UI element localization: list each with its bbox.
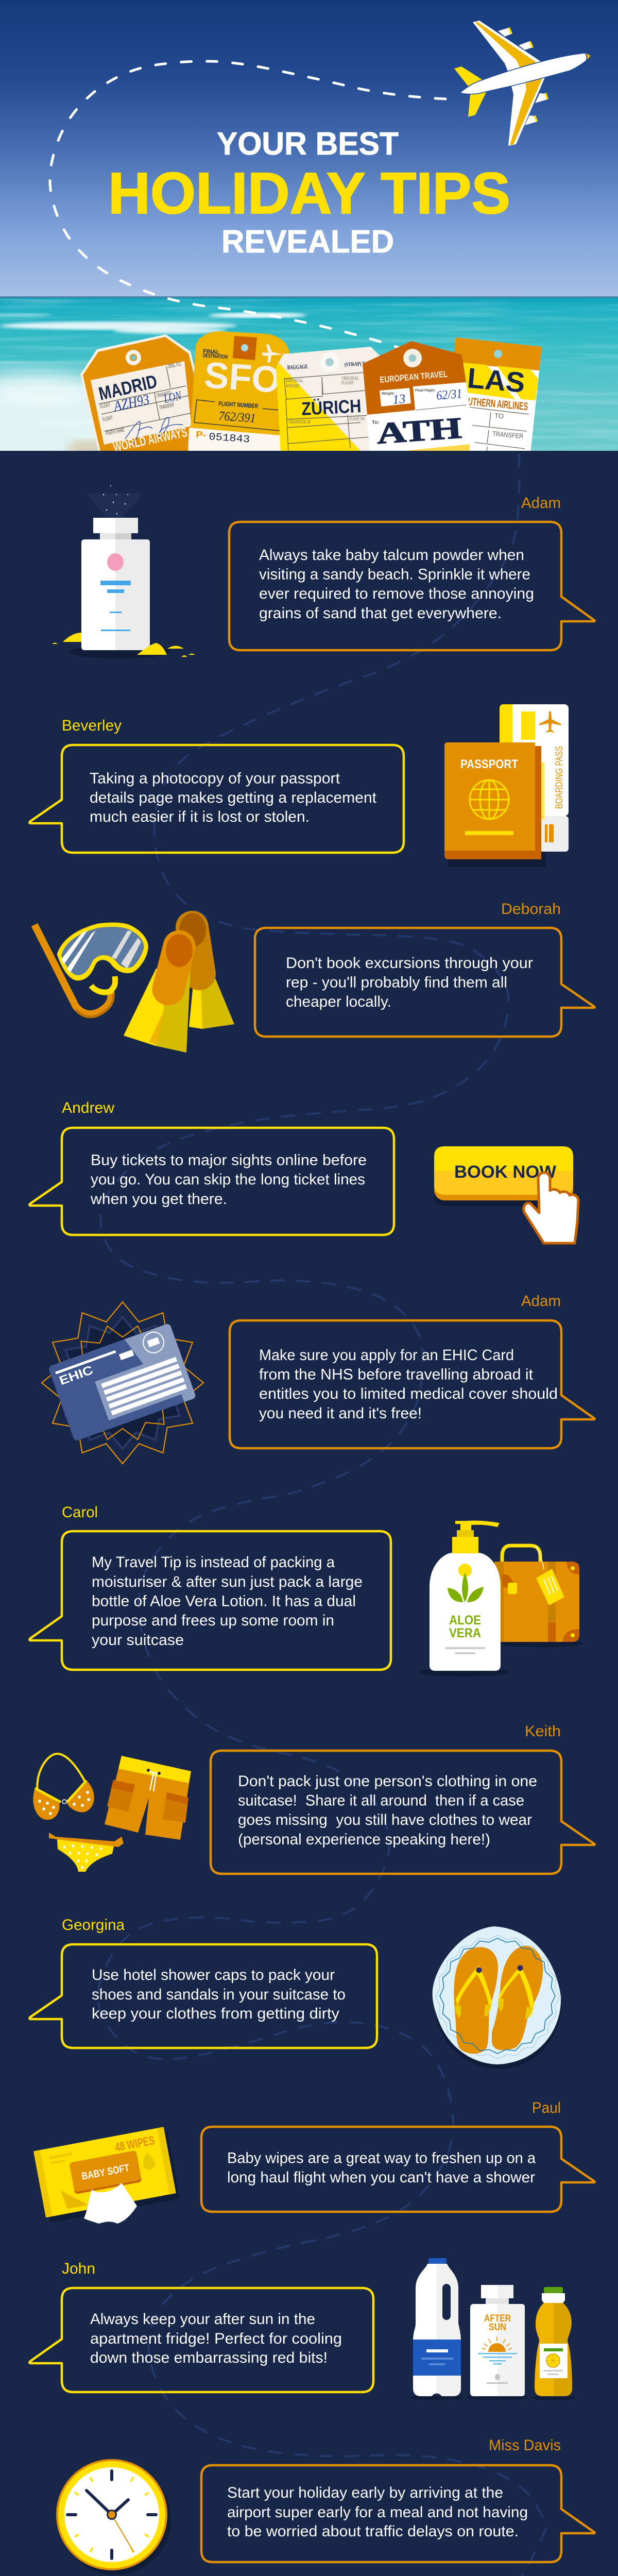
name: Miss Davis: Miss Davis: [489, 2437, 561, 2454]
tip text: Use hotel shower caps to pack your: [92, 1967, 335, 1984]
luggage tag: Madrid: ORIG. FLT.: [167, 361, 182, 370]
icon: book now button with hand cursor: BOOK NOW: [454, 1162, 557, 1182]
tip text: Make sure you apply for an EHIC Card: [259, 1347, 514, 1364]
icon: baby wipes packet: BABY SOFT: [81, 2162, 130, 2182]
tip text: goes missing you still have clothes to wear: [238, 1811, 532, 1828]
icon: baby wipes packet: 48 WIPES: [114, 2133, 156, 2155]
luggage tag: Athens: Weight:: [382, 392, 395, 396]
luggage tag: Zurich: ZÜRICH: [301, 395, 362, 419]
luggage tag: LAS: UTHERN AIRLINES: [468, 396, 528, 413]
speech bubble: [211, 1751, 595, 1874]
tip text: Baby wipes are a great way to freshen up on a: [227, 2149, 536, 2167]
tip text: long haul flight when you can't have a shower: [227, 2169, 535, 2186]
luggage tag: Athens: Final Flight:: [415, 389, 436, 393]
tip panel: Adam talcum powder: [52, 485, 595, 658]
tip text: [259, 1347, 558, 1422]
tip text: [286, 955, 533, 1010]
tip text: rep - you'll probably find them all: [286, 974, 507, 991]
speech bubble: [29, 1944, 377, 2048]
tip text: Always take baby talcum powder when: [259, 547, 524, 564]
tip text: cheaper locally.: [286, 993, 391, 1010]
tip text: Don't book excursions through your: [286, 955, 533, 972]
tip text: [227, 2484, 528, 2540]
title: YOUR BEST: [217, 126, 399, 162]
tip text: moisturiser & after sun just pack a large: [92, 1573, 363, 1590]
tip text: your suitcase: [92, 1632, 184, 1649]
luggage tag: SFO: [188, 331, 291, 453]
tip text: shoes and sandals in your suitcase to: [92, 1986, 346, 2003]
speech bubble: [29, 2288, 373, 2392]
luggage tag: Athens: 62/31: [436, 387, 462, 403]
luggage tag: Athens: [363, 341, 476, 453]
tip text: entitles you to limited medical cover should: [259, 1385, 558, 1402]
luggage tag: Madrid: TRANSFER: [156, 390, 171, 399]
dashed flight route across the page: [98, 453, 546, 2576]
dashed flight path over sky and sea: [50, 61, 445, 348]
icon: aloe vera bottle and suitcase: ALOE: [449, 1613, 481, 1628]
tip text: [90, 2311, 342, 2366]
icon: book now button with hand cursor: [434, 1146, 578, 1243]
sky: [0, 0, 618, 297]
tip text: bottle of Aloe Vera Lotion. It has a dual: [92, 1593, 356, 1609]
tip text: (personal experience speaking here!): [238, 1831, 490, 1848]
luggage tag: LAS: TO: [494, 412, 504, 420]
tip panel: Adam EHIC card: [42, 1293, 595, 1464]
luggage tag: Athens: ATH: [375, 411, 463, 450]
tip text: grains of sand that get everywhere.: [259, 605, 502, 622]
panel: header beach photo: [0, 0, 618, 474]
title: [111, 132, 509, 252]
luggage tag: Zurich: WEIGHT: [286, 384, 300, 389]
luggage tag: LAS: [453, 337, 542, 453]
name: Deborah: Deborah: [501, 901, 561, 918]
luggage tag: Zurich: FLIGHT: [341, 381, 354, 386]
icon: clock: [56, 2459, 171, 2575]
tip text: keep your clothes from getting dirty: [92, 2005, 339, 2022]
tip text: My Travel Tip is instead of packing a: [92, 1554, 335, 1571]
tip panel: Andrew tickets: [29, 1099, 578, 1243]
name: Keith: Keith: [525, 1723, 561, 1740]
name: Paul: Paul: [532, 2099, 561, 2116]
luggage tag: SFO: FLIGHT NUMBER: [218, 400, 259, 410]
luggage tag: SFO: FINAL: [203, 348, 220, 355]
icon: aloe vera bottle and suitcase: [419, 1521, 583, 1676]
luggage tag: Athens: EUROPEAN TRAVEL: [380, 369, 448, 385]
tip text: Buy tickets to major sights online before: [91, 1152, 367, 1168]
tip panel: Paul baby wipes: [33, 2099, 595, 2224]
icon: passport and boarding pass: [444, 704, 569, 867]
tip text: from the NHS before travelling abroad it: [259, 1366, 534, 1383]
tip text: [238, 1773, 537, 1848]
icon: EHIC card with starburst: EHIC: [57, 1363, 95, 1388]
icon: flip flops on shower cap: [433, 1926, 562, 2069]
tip text: [90, 1152, 367, 1208]
luggage tag: LAS: LAS: [466, 362, 526, 399]
tip panel: Beverley passport: [29, 704, 569, 867]
tip text: you go. You can skip the long ticket lines: [91, 1171, 365, 1188]
tip text: [90, 770, 377, 825]
tip text: Taking a photocopy of your passport: [90, 770, 340, 787]
luggage tag: Athens: 13: [392, 392, 406, 407]
tip text: Don't pack just one person's clothing in one: [238, 1773, 537, 1790]
luggage tag: Zurich: (STRAP) T: [345, 361, 365, 368]
luggage tag: Madrid: MADRID: [97, 370, 159, 404]
luggage tag: SFO: 762/391: [218, 409, 256, 426]
tip panel: Georgina shower caps: [29, 1917, 562, 2069]
luggage tag: SFO: DESTINATION: [203, 352, 228, 360]
luggage tag: Madrid: WORLD AIRWAYS: [112, 424, 188, 455]
tip text: down those embarrassing red bits!: [90, 2349, 328, 2366]
tip text: you need it and it's free!: [259, 1405, 422, 1422]
icon: aloe vera bottle and suitcase: VERA: [449, 1626, 481, 1640]
tip text: airport super early for a meal and not having: [227, 2504, 528, 2521]
tip panel: Miss Davis arrive early: [56, 2437, 595, 2575]
luggage tag: Zurich: [276, 347, 386, 453]
icon: bottles in fridge: SUN: [489, 2322, 506, 2333]
speech bubble: [29, 1128, 394, 1235]
icon: talcum powder bottle: [52, 485, 195, 658]
luggage tag: Athens: To:: [372, 420, 380, 426]
speech bubble: [201, 2127, 595, 2212]
luggage tag: Madrid: LON: [162, 389, 183, 406]
tip panel: John after sun: [29, 2258, 575, 2400]
tip text: to be worried about traffic delays on route.: [227, 2523, 519, 2540]
tip text: [259, 547, 534, 622]
tip text: suitcase! Share it all around then if a case: [238, 1792, 524, 1809]
tip text: when you get there.: [90, 1191, 227, 1208]
luggage tag: SFO: 051843: [209, 431, 250, 446]
luggage tag: LAS: TRANSFER: [492, 430, 524, 440]
tip text: Always keep your after sun in the: [90, 2311, 315, 2328]
name: Georgina: Georgina: [62, 1917, 125, 1934]
luggage tag: Zurich: ORIGINAL: [341, 376, 359, 381]
tip text: Start your holiday early by arriving at the: [227, 2484, 503, 2501]
luggage tag: Zurich: BAGGAGE: [287, 364, 308, 371]
tip panel: Deborah excursions: [35, 901, 595, 1053]
icon: passport and boarding pass: PASSPORT: [460, 757, 518, 771]
name: Beverley: Beverley: [62, 717, 122, 734]
speech bubble: [29, 1531, 391, 1670]
luggage tag: Zurich: TRANSFER AT: [288, 420, 311, 425]
speech bubble: [201, 2465, 595, 2562]
tip text: much easier if it is lost or stolen.: [90, 808, 310, 825]
speech bubble: [229, 522, 595, 650]
sea: [0, 296, 618, 451]
speech bubble: [255, 928, 595, 1037]
speech bubble: [29, 745, 404, 853]
tip text: [92, 1554, 363, 1649]
tip panel: Carol aloe vera: [29, 1504, 583, 1676]
luggage tag: SFO: SFO: [203, 354, 282, 401]
name: Adam: Adam: [521, 1293, 561, 1310]
luggage tag: Madrid: PSGR'S NAME: [105, 427, 125, 437]
icon: swimwear: [33, 1754, 191, 1872]
name: Carol: Carol: [62, 1504, 98, 1521]
luggage tag: Madrid: FLIGHT: [99, 402, 111, 410]
icon: snorkel and flippers: [35, 913, 234, 1053]
luggage tag: Madrid: AZH93: [111, 392, 151, 415]
tip panel: Keith clothing: [33, 1723, 595, 1874]
icon: bottles in fridge: [410, 2258, 575, 2400]
title: REVEALED: [221, 224, 394, 260]
tip text: visiting a sandy beach. Sprinkle it where: [259, 566, 530, 583]
luggage tag: Madrid: FLIGHT: [102, 415, 113, 423]
speech bubble: [230, 1320, 595, 1448]
icon: passport and boarding pass: BOARDING PASS: [554, 746, 565, 809]
icon: baby wipes packet: [33, 2127, 180, 2224]
icon: EHIC card with starburst: [42, 1302, 203, 1464]
luggage tag: Madrid: TRANSFER: [159, 402, 175, 411]
icon: bottles in fridge: AFTER: [484, 2313, 511, 2324]
tip text: [227, 2149, 536, 2186]
name: Andrew: Andrew: [62, 1099, 114, 1116]
title: HOLIDAY TIPS: [108, 161, 510, 226]
luggage tag: Madrid: [80, 334, 198, 455]
tip text: purpose and frees up some room in: [92, 1612, 334, 1629]
icon: aeroplane: [454, 21, 591, 146]
luggage tag: Zurich: INDIVIDUAL: [286, 379, 303, 384]
tip text: details page makes getting a replacement: [90, 789, 377, 806]
tip text: apartment fridge! Perfect for cooling: [90, 2330, 342, 2347]
luggage tag: Zurich: FLIGHT NO: [349, 417, 365, 422]
tip text: ever required to remove those annoying: [259, 585, 534, 602]
name: John: John: [62, 2260, 95, 2277]
name: Adam: Adam: [521, 495, 561, 512]
tip text: [92, 1967, 346, 2022]
luggage tag: SFO: P-: [196, 429, 207, 440]
